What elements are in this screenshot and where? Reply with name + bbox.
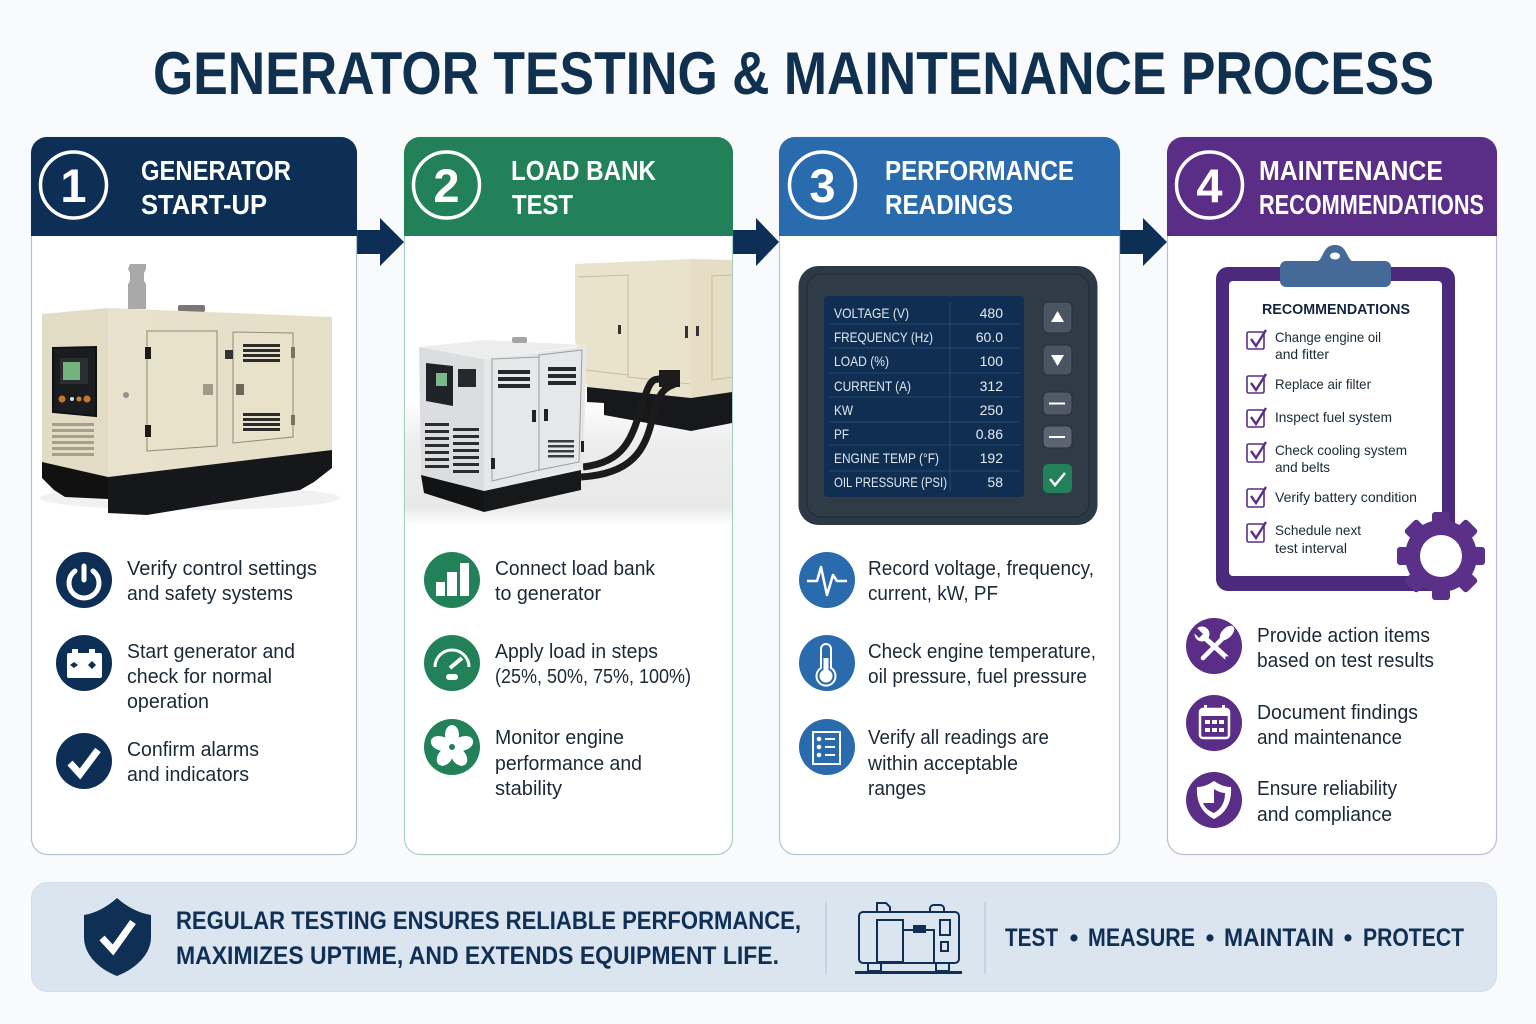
- step: record voltage: [799, 552, 1094, 608]
- step: document findings: [1186, 695, 1418, 751]
- readings table: 58: [987, 474, 1003, 490]
- clipboard: [1216, 245, 1485, 600]
- checklist: Verify battery condition: [1275, 489, 1417, 505]
- readings table: 100: [980, 353, 1003, 369]
- panel: generator start-up: [31, 137, 357, 854]
- step: check engine temperature: oil pressure, fuel pressure: [868, 666, 1087, 688]
- motto: PROTECT: [1363, 924, 1464, 952]
- header: step 1: [31, 137, 357, 236]
- readings table: ENGINE TEMP (°F): [834, 450, 939, 466]
- readings table: FREQUENCY (Hz): [834, 329, 933, 345]
- header: step 2: TEST: [512, 189, 573, 220]
- step: apply load in steps: (25%, 50%, 75%, 100%): [495, 666, 691, 688]
- step: record voltage: Record voltage, frequency,: [868, 558, 1094, 580]
- motto: [1005, 924, 1464, 952]
- header: step 4: MAINTENANCE: [1259, 155, 1443, 186]
- step: confirm alarms: [56, 733, 259, 789]
- step: provide action items: based on test results: [1257, 650, 1434, 672]
- icon: shield with check: [84, 898, 151, 976]
- readings table: PF: [834, 426, 849, 442]
- step: verify control settings: [56, 552, 317, 608]
- checklist: Replace air filter: [1275, 376, 1371, 392]
- step: start generator: operation: [127, 691, 209, 713]
- header: step 3: [779, 137, 1120, 236]
- step: monitor engine: Monitor engine: [495, 727, 624, 749]
- header: step 2: 2: [433, 159, 460, 212]
- step: start generator: [56, 635, 295, 713]
- step: monitor engine: stability: [495, 778, 562, 800]
- controller display: [798, 266, 1098, 525]
- header: step 1: 1: [60, 159, 87, 212]
- step: record voltage: current, kW, PF: [868, 583, 998, 605]
- motto: TEST: [1005, 924, 1058, 952]
- step: ensure reliability: Ensure reliability: [1257, 778, 1397, 800]
- panel: performance readings: [779, 137, 1120, 854]
- step: ensure reliability: and compliance: [1257, 804, 1392, 826]
- readings table: OIL PRESSURE (PSI): [834, 474, 947, 490]
- panel: load bank test: [404, 137, 733, 854]
- arrow: step 2 to step 3: [733, 218, 779, 266]
- step: verify all readings: [799, 719, 1049, 800]
- footer banner: [32, 882, 1496, 992]
- header: step 2: LOAD BANK: [511, 155, 656, 186]
- step: verify all readings: ranges: [868, 778, 926, 800]
- step: verify control settings: and safety systems: [127, 583, 293, 605]
- step: ensure reliability: [1186, 772, 1397, 828]
- readings table: 192: [980, 450, 1003, 466]
- readings table: CURRENT (A): [834, 378, 911, 394]
- step: connect load bank: [424, 552, 656, 608]
- checklist: Check cooling system: [1275, 442, 1407, 458]
- readings table: 60.0: [976, 329, 1003, 345]
- motto: MEASURE: [1088, 924, 1195, 952]
- checklist: Change engine oil: [1275, 329, 1381, 345]
- header: step 4: 4: [1196, 159, 1223, 212]
- header: step 3: READINGS: [885, 189, 1013, 220]
- step: verify all readings: within acceptable: [867, 753, 1018, 775]
- step: verify control settings: Verify control settings: [127, 558, 317, 580]
- step: apply load in steps: Apply load in steps: [495, 641, 658, 663]
- header: step 1: GENERATOR: [141, 155, 291, 186]
- motto: •: [1206, 924, 1214, 952]
- step: connect load bank: to generator: [495, 583, 601, 605]
- header: step 3: PERFORMANCE: [885, 155, 1074, 186]
- header: step 2: [404, 137, 733, 236]
- checklist: Schedule next: [1275, 522, 1361, 538]
- step: start generator: check for normal: [127, 666, 272, 688]
- step: monitor engine: performance and: [495, 753, 642, 775]
- readings table: 250: [980, 402, 1003, 418]
- illustration: beige generator: [40, 264, 340, 515]
- checklist: and fitter: [1275, 346, 1329, 362]
- header: step 1: START-UP: [141, 189, 267, 220]
- checklist: Inspect fuel system: [1275, 409, 1392, 425]
- header: step 4: [1167, 137, 1497, 236]
- step: verify all readings: Verify all readings are: [868, 727, 1049, 749]
- readings table: 0.86: [976, 426, 1003, 442]
- step: confirm alarms: Confirm alarms: [127, 739, 259, 761]
- step: connect load bank: Connect load bank: [495, 558, 656, 580]
- illustration floor: [405, 400, 732, 526]
- step: start generator: Start generator and: [127, 641, 295, 663]
- banner message: REGULAR TESTING ENSURES RELIABLE PERFORMANCE,: [176, 907, 801, 935]
- readings table: KW: [834, 402, 854, 418]
- checklist: test interval: [1275, 540, 1347, 556]
- motto: •: [1344, 924, 1352, 952]
- readings table: 312: [980, 378, 1003, 394]
- readings table: VOLTAGE (V): [834, 305, 909, 321]
- checklist: [1247, 329, 1417, 556]
- readings table: LOAD (%): [834, 353, 889, 369]
- header: step 3: 3: [809, 159, 836, 212]
- step: check engine temperature: [799, 635, 1096, 691]
- icon: generator outline: [855, 903, 962, 972]
- step: confirm alarms: and indicators: [127, 764, 249, 786]
- clipboard: RECOMMENDATIONS: [1262, 302, 1410, 318]
- readings table: 480: [980, 305, 1003, 321]
- control buttons: [1043, 302, 1072, 493]
- arrow: step 1 to step 2: [357, 218, 404, 266]
- step: apply load in steps: [424, 635, 691, 691]
- step: document findings: Document findings: [1257, 702, 1418, 724]
- illustration: load bank connected to generator: [419, 259, 732, 512]
- step: provide action items: Provide action items: [1257, 625, 1430, 647]
- icon: gear: [1397, 512, 1485, 600]
- arrow: step 3 to step 4: [1120, 218, 1167, 266]
- step: provide action items: [1186, 618, 1434, 674]
- checklist: and belts: [1275, 459, 1330, 475]
- readings table: [834, 305, 1003, 490]
- motto: •: [1070, 924, 1078, 952]
- motto: MAINTAIN: [1224, 924, 1334, 952]
- banner message: MAXIMIZES UPTIME, AND EXTENDS EQUIPMENT LIFE.: [176, 942, 779, 970]
- step: document findings: and maintenance: [1257, 727, 1402, 749]
- panel: maintenance recommendations: [1167, 137, 1497, 854]
- step: monitor engine: [424, 719, 642, 800]
- banner message: [176, 907, 801, 970]
- step: check engine temperature: Check engine temperature,: [868, 641, 1096, 663]
